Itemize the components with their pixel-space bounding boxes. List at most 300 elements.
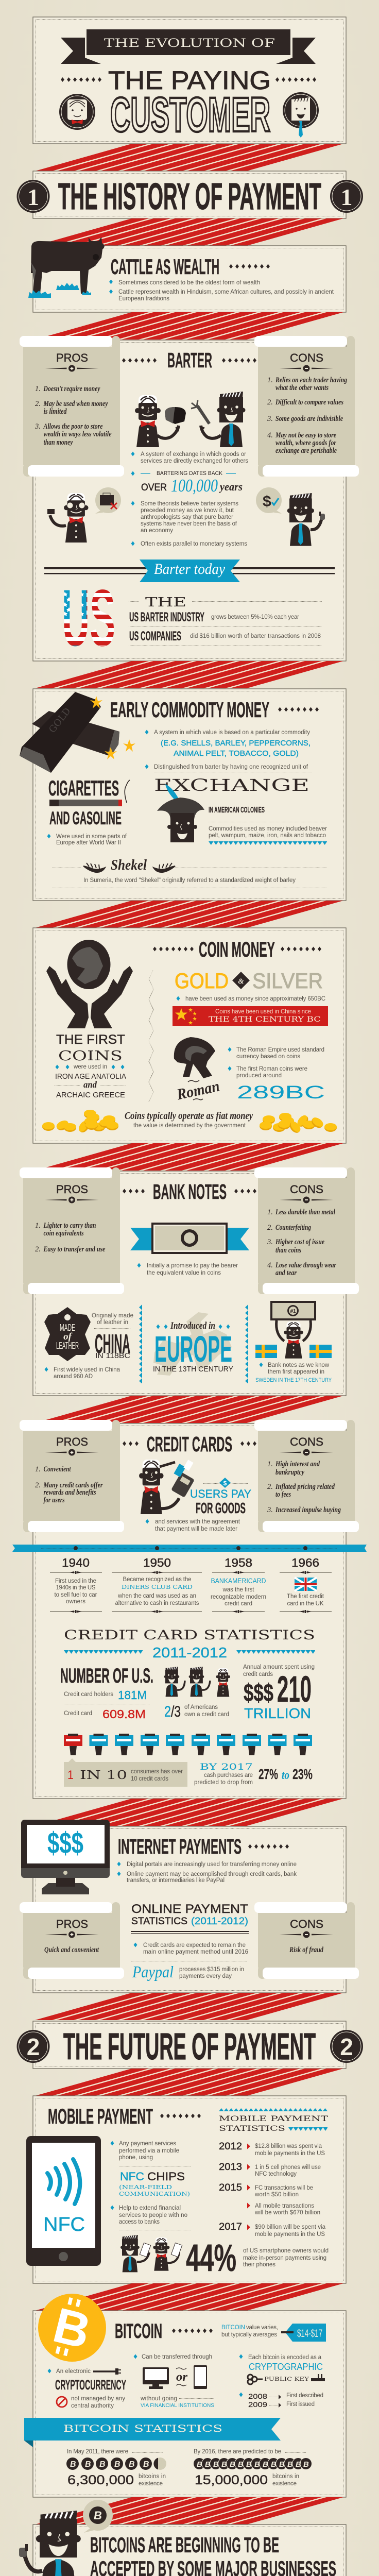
text: commodity definition: ANIMAL PELT, TOBACCO, GOLD) [174, 749, 299, 758]
text: commodity definition: A system in which value is based on a particular commodity [154, 730, 310, 736]
heading: mobile payment: MOBILE PAYMENT [48, 2104, 153, 2128]
scroll: barter pros: Allows the poor to store [43, 422, 103, 431]
scroll: bank notes cons: 1. [267, 1208, 273, 1216]
timeline: 1950: Became recognized as the [123, 1577, 192, 1583]
icon: leather badge [44, 1307, 91, 1361]
scroll: bank notes cons: CONS [290, 1183, 323, 1196]
timeline: 1966: card in the UK [287, 1601, 324, 1607]
callout: bitcoin value tag: BITCOIN [221, 2324, 245, 2331]
text: roman coins [228, 1047, 325, 1103]
stat: 44 percent: make in-person payments using [243, 2255, 326, 2261]
heading: exchange: EXCHANGE [154, 775, 309, 795]
text: the US barter stats: did $16 billion worth of barter transactions in 2008 [190, 633, 321, 639]
icons: ten hands holding cards [64, 1734, 312, 1755]
stat: 44 percent [186, 2236, 329, 2279]
list: mobile statistics by year: 2017 [219, 2222, 242, 2232]
stat: 210 trillion: credit cards [243, 1671, 273, 1677]
text: cryptographic public key: CRYPTOGRAPHIC [249, 2362, 323, 2372]
ribbon [35, 1143, 343, 1171]
text: promise to pay [137, 1263, 238, 1276]
text: barter definition: services are directly exchanged for others [141, 458, 248, 464]
stat: by 2017 cash purchases: 27% [259, 1766, 278, 1782]
list: mobile statistics by year: 2013 [219, 2162, 242, 2173]
scroll: credit cards cons: High interest and [275, 1460, 320, 1468]
text: cryptographic public key: First issued [286, 2401, 315, 2408]
ribbon [35, 901, 343, 928]
title banner: THE EVOLUTION OF [104, 37, 275, 50]
scroll: credit cards pros: PROS [56, 1435, 88, 1448]
badge 1 right [330, 180, 363, 213]
scroll: credit cards cons: bankruptcy [275, 1468, 304, 1477]
stat: bitcoins in 2011: bitcoins in [139, 2473, 166, 2480]
panel: barter: US [62, 573, 115, 663]
text: cattle facts: Sometimes considered to be the oldest form of wealth [118, 280, 260, 286]
list: mobile statistics by year: mobile payments in the US [255, 2231, 325, 2238]
text: shekel note: Shekel [111, 857, 147, 873]
stat: bitcoins in 2011: existence [139, 2481, 163, 2487]
text: online payment statistics: Credit cards are expected to remain the [143, 1942, 246, 1948]
text: transfer through devices: VIA FINANCIAL INSTITUTIONS [141, 2403, 214, 2409]
list: mobile statistics by year: mobile payments in the US [255, 2150, 325, 2157]
text: barter theory: Some theorists believe barter systems [141, 501, 238, 507]
stat: 44 percent: of US smartphone owners would [243, 2248, 329, 2254]
heading: gold and silver: GOLD [175, 969, 229, 993]
scroll: bank notes pros: Lighter to carry than [43, 1222, 96, 1230]
banner: bitcoin statistics [24, 2418, 281, 2447]
illustration: man holding note with swedish flags [255, 1301, 332, 1359]
text: cigarettes and gasoline: CIGARETTES [48, 776, 119, 800]
ribbon [35, 2497, 343, 2524]
stat: bitcoins in 2016: 15,000,000 [195, 2473, 268, 2487]
text: the US barter stats: US COMPANIES [129, 629, 181, 643]
text: cryptographic public key [239, 2354, 325, 2409]
text: barter theory: an economy [141, 528, 173, 534]
timeline: 1958: credit card [225, 1601, 252, 1607]
callout: 1 in 10 consumers: 1 [67, 1768, 74, 1782]
heading: cattle as wealth: CATTLE AS WEALTH [111, 255, 219, 279]
text: online payment statistics: STATISTICS [131, 1916, 187, 1927]
timeline: 1966 [280, 1556, 332, 1613]
callout: 1 in 10 consumers [64, 1758, 187, 1787]
text: cigarettes and gasoline: Were used in some parts of [56, 834, 127, 840]
scroll: bank notes cons: 3. [267, 1238, 273, 1246]
scroll: bank notes pros: PROS [56, 1183, 88, 1196]
heading: gold and silver [175, 969, 325, 1002]
text: cigarettes and gasoline [47, 776, 130, 846]
illustration: customers with phones [120, 2235, 182, 2272]
timeline: 1958: was the first [222, 1587, 254, 1593]
panel: bank notes [20, 1167, 359, 1396]
illustration: 2/3 of Americans: 2 [164, 1703, 171, 1720]
text: commodity definition [145, 730, 313, 772]
callout: 1 in 10 consumers: consumers has over [131, 1769, 183, 1775]
text: commodity definition: Distinguished from barter by having one recognized unit of [154, 764, 308, 770]
illustration: customer offers carrot [191, 392, 245, 447]
scroll: bank notes pros [20, 1167, 124, 1294]
portrait: bow tie customer [59, 94, 95, 130]
text: users pay for goods: USERS PAY [190, 1487, 251, 1500]
text: shekel note [52, 857, 327, 888]
scroll: bank notes cons: Less durable than metal [275, 1208, 335, 1216]
illustration: roman helmet: Roman [175, 1078, 221, 1104]
title panel [33, 17, 346, 144]
text: made in china: First widely used in China [54, 1367, 120, 1373]
text: roman coins: produced around [236, 1073, 282, 1079]
scroll: credit cards cons: to fees [275, 1490, 291, 1499]
text: roman coins: currency based on coins [236, 1054, 300, 1060]
text: the first coins: THE FIRST [56, 1032, 125, 1047]
icon: desktop monitor [21, 1820, 110, 1894]
text: sweden: them first appeared in [268, 1369, 324, 1375]
text: american colonies: Commodities used as money included beaver [209, 826, 327, 832]
panel: internet payments [20, 1820, 359, 1993]
text: barter theory: Often exists parallel to monetary systems [141, 541, 247, 547]
heading: bank notes: BANK NOTES [153, 1180, 227, 1204]
icon: leather badge: MADE [60, 1323, 75, 1333]
text: shekel note: In Sumeria, the word "Shekel" originally referred to a standardized weight of barley [83, 877, 296, 884]
text: internet payment facts: Online payment may be accomplished through credit cards, bank [127, 1871, 297, 1877]
icon: bitcoin coin: B [48, 2297, 96, 2360]
text: transfer through devices [134, 2354, 214, 2409]
callout: bitcoin value tag: value varies, [246, 2325, 278, 2331]
icon: leather badge: of [63, 1331, 73, 1342]
heading: gold and silver: SILVER [252, 969, 323, 993]
scroll: internet pros [20, 1902, 124, 1979]
scroll: credit cards pros: rewards and benefits [43, 1488, 96, 1497]
scroll: barter cons: CONS [290, 351, 323, 364]
text: the first coins: and [83, 1079, 97, 1090]
text: the first coins [55, 1032, 126, 1099]
scroll: barter pros: wealth in ways less volatile [43, 430, 112, 438]
timeline: 1950 [112, 1556, 202, 1613]
text: the US barter stats: THE [145, 595, 186, 609]
panel: bitcoins accepted [19, 2500, 346, 2576]
scroll: internet pros: Quick and convenient [44, 1946, 99, 1954]
timeline: 1940 [50, 1556, 102, 1613]
scroll: barter pros: PROS [56, 351, 88, 364]
scroll: credit cards cons: Inflated pricing related [275, 1483, 335, 1491]
scroll: barter cons [254, 336, 359, 477]
stat: 210 trillion: TRILLION [244, 1705, 311, 1721]
text: NFC chips: Help to extend financial [119, 2205, 181, 2211]
illustration: customer with thumbs up and bubble [256, 487, 325, 546]
text: made in china: of leather in [97, 1319, 128, 1326]
text: users pay for goods: FOR GOODS [196, 1500, 246, 1517]
stat: bitcoins in 2011 [66, 2449, 166, 2487]
illustration: customer with glasses and bubble [47, 487, 121, 543]
scroll: bank notes cons: than coins [275, 1246, 301, 1255]
text: NFC chips: Any payment services [119, 2141, 176, 2147]
badge 1 right: 1 [341, 184, 352, 210]
icon: hands holding coin [46, 940, 133, 1028]
list: mobile statistics by year: 2015 [219, 2182, 242, 2193]
text: NFC chips: (NEAR-FIELD [119, 2184, 172, 2191]
icons: gold coin piles [42, 1110, 337, 1135]
illustration: colonial man with feather [157, 784, 204, 842]
stat: by 2017 cash purchases: BY 2017 [200, 1762, 253, 1772]
heading: credit cards: CREDIT CARDS [147, 1432, 232, 1456]
scroll: bank notes pros: 2. [35, 1245, 41, 1253]
text: NFC chips: COMMUNICATION) [119, 2191, 190, 2197]
scroll: credit cards pros: 1. [35, 1465, 41, 1473]
divider: dotted zigzag [149, 971, 153, 1101]
stat: bitcoins in 2016 [194, 2449, 312, 2487]
scroll: internet cons [254, 1902, 359, 1979]
heading: gold and silver: & [238, 977, 244, 986]
text: online payment statistics: (2011-2012) [191, 1916, 248, 1927]
ribbon [35, 661, 343, 688]
heading: coin money [153, 937, 321, 961]
list: mobile statistics by year: All mobile transactions [255, 2203, 314, 2209]
text: sweden: SWEDEN IN THE 17TH CENTURY [255, 1377, 332, 1383]
callout: 1 in 10 consumers: 10 credit cards [131, 1776, 168, 1782]
text: transfer through devices: Can be transferred through [142, 2354, 212, 2360]
timeline: 1940: First used in the [55, 1578, 96, 1584]
scroll: barter pros: than money [43, 438, 73, 447]
scroll: bank notes cons [254, 1167, 359, 1294]
panel: cattle as wealth [28, 237, 346, 312]
text: cryptographic public key: First described [286, 2393, 323, 2399]
scroll: bank notes cons: 2. [267, 1224, 273, 1232]
title banner [61, 29, 316, 64]
text: cryptocurrency: CRYPTOCURRENCY [55, 2377, 126, 2393]
text: internet payment facts [117, 1861, 297, 1884]
scroll: bank notes cons: and tear [275, 1269, 297, 1277]
text: cryptographic public key: 2009 [248, 2400, 267, 2409]
text: fiat money: Coins typically operate as fiat money [125, 1110, 253, 1122]
callout: 1 in 10 consumers: IN 10 [80, 1769, 127, 1782]
list: mobile statistics by year [219, 2141, 326, 2238]
icon: leather badge: LEATHER [56, 1341, 79, 1351]
scroll: credit cards pros [20, 1420, 124, 1532]
scroll: barter cons: 4. [267, 431, 273, 439]
text: cryptocurrency: An electronic [56, 2368, 91, 2375]
list: mobile statistics by year: $90 billion will be spent via [255, 2224, 326, 2230]
list: mobile statistics by year: NFC technology [255, 2171, 297, 2177]
text: roman coins: The first Roman coins were [236, 1066, 307, 1072]
text: the US barter stats: grows between 5%-10% each year [211, 614, 299, 620]
text: internet payment facts: transfers, or intermediaries like PayPal [127, 1877, 225, 1884]
map: europe [153, 1312, 232, 1376]
banner: bitcoin statistics: BITCOIN STATISTICS [63, 2423, 222, 2434]
scroll: barter pros: 3. [35, 422, 41, 431]
text: users pay for goods [145, 1478, 251, 1532]
ribbon [35, 144, 343, 171]
text: sweden: Bank notes as we know [268, 1362, 330, 1368]
text: online payment statistics: main online payment method until 2016 [143, 1949, 248, 1955]
text: introduced in europe: IN THE 13TH CENTURY [153, 1365, 233, 1374]
scroll: bank notes pros: 1. [35, 1222, 41, 1230]
scroll: bank notes cons: Higher cost of issue [275, 1238, 324, 1246]
text: the US barter stats [129, 595, 322, 646]
heading: bitcoin: BITCOIN [115, 2320, 162, 2343]
text: the first coins: COINS [58, 1048, 123, 1064]
text: promise to pay: Initially a promise to pay the bearer [147, 1263, 238, 1269]
text: made in china: Originally made [92, 1313, 133, 1319]
scroll: barter cons: what the other wants [275, 384, 329, 392]
heading: barter [122, 348, 256, 372]
scroll: credit cards pros: 2. [35, 1481, 41, 1489]
text: roman coins: 289BC [237, 1082, 325, 1103]
heading: bank notes [123, 1180, 256, 1204]
callout: bitcoin value tag: but typically averages [221, 2332, 277, 2338]
scroll: credit cards cons: 3. [267, 1506, 273, 1514]
text: online payment statistics: Paypal [132, 1962, 174, 1981]
text: cryptocurrency: central authority [71, 2403, 114, 2409]
text: barter theory: anthropologists say that pure barter [141, 514, 233, 520]
scroll: barter pros: is limited [43, 408, 67, 416]
stat: 210 trillion: Annual amount spent using [243, 1664, 315, 1670]
scroll: credit cards cons: CONS [290, 1435, 323, 1448]
stat: 44 percent: their phones [243, 2262, 275, 2268]
text: barter theory: systems have never been the basis of [141, 521, 237, 527]
list: mobile statistics by year: will be worth $670 billion [254, 2210, 320, 2216]
text: transfer through devices: or [176, 2370, 188, 2384]
timeline: 1950: 1950 [143, 1556, 171, 1569]
scroll: barter pros: 2. [35, 400, 41, 408]
text: internet payment facts: Digital portals are increasingly used for transferring money online [127, 1861, 297, 1868]
scroll: internet cons: CONS [290, 1918, 323, 1930]
heading: bitcoins accepted [90, 2533, 336, 2576]
illustration: customer with card terminal [139, 1460, 195, 1514]
scroll: bank notes cons: Lose value through wear [275, 1261, 336, 1269]
timeline: 1940: 1940s in the US [56, 1585, 96, 1591]
timeline: 1966: The first credit [287, 1594, 324, 1600]
stat: by 2017 cash purchases: to [282, 1769, 289, 1782]
text: NFC chips: services to people with no [119, 2212, 187, 2218]
timeline band [12, 1545, 367, 1552]
callout: over 100,000 years: OVER [141, 482, 167, 493]
banner: barter today [44, 560, 335, 582]
text: NFC chips [110, 2141, 191, 2230]
text: fiat money [125, 1110, 253, 1129]
panel: bitcoin [24, 2294, 346, 2497]
banner: barter today: Barter today [154, 561, 226, 578]
scroll: barter pros [20, 336, 124, 477]
scroll: barter cons: Some goods are indivisible [275, 415, 343, 423]
stat: bitcoins in 2011: 6,300,000 [67, 2473, 134, 2487]
icon: cow [28, 237, 105, 298]
heading: coin money: COIN MONEY [199, 937, 275, 961]
timeline: 1958: BANKAMERICARD [211, 1577, 266, 1585]
illustration: 2/3 of Americans: of Americans [184, 1704, 218, 1710]
text: cigarettes and gasoline: Europe after World War II [56, 840, 121, 846]
timeline: 1950: when the card was used as an [117, 1593, 196, 1599]
text: online payment statistics [131, 1902, 249, 1981]
stat: number of US cards: Credit card holders [64, 1691, 113, 1698]
heading: credit card statistics: 2011-2012 [152, 1645, 227, 1660]
timeline: 1950: DINERS CLUB CARD [122, 1584, 193, 1590]
list: mobile statistics by year: worth $50 billion [254, 2192, 299, 2198]
text: american colonies: pelt, wampum, maize, iron, nails and tobacco [209, 833, 326, 839]
panel: mobile payment [26, 2096, 346, 2283]
text: cryptographic public key: Each bitcoin is encoded as a [248, 2354, 322, 2361]
text: sweden [255, 1362, 332, 1383]
illustration: 2/3 of Americans: own a credit card [184, 1711, 229, 1718]
badge 2 left: 2 [27, 2033, 40, 2060]
ribbon [35, 218, 343, 246]
callout: over 100,000 years [131, 470, 243, 496]
stat: 44 percent: 44% [186, 2236, 236, 2279]
heading: credit card statistics [64, 1628, 315, 1660]
illustration: customer with bitcoin bubble: B [94, 2509, 102, 2522]
scroll: internet pros: PROS [56, 1918, 88, 1930]
text: online payment statistics: ONLINE PAYMENT [131, 1902, 248, 1916]
illustration: customer with bitcoin bubble [19, 2500, 113, 2576]
scroll: credit cards pros: for users [43, 1496, 65, 1504]
portrait: necktie customer [283, 92, 319, 138]
callout: bitcoin value tag: $14-$17 [297, 2328, 322, 2340]
scroll: credit cards cons [254, 1420, 359, 1532]
text: cryptocurrency: not managed by any [71, 2396, 125, 2402]
stat: bitcoins in 2016: bitcoins in [272, 2473, 299, 2480]
text: introduced in europe: Introduced in [170, 1320, 215, 1331]
text: barter definition: A system of exchange in which goods or [141, 451, 246, 457]
text: fiat money: the value is determined by the government [133, 1123, 246, 1129]
scroll: barter cons: Difficult to compare values [275, 398, 343, 406]
badge 1 left [16, 180, 49, 213]
text: cryptographic public key: 2008 [248, 2392, 267, 2400]
text: made in china: around 960 AD [54, 1374, 93, 1380]
scroll: barter pros: Doesn't require money [43, 385, 100, 393]
text: the first coins: IRON AGE ANATOLIA [55, 1072, 126, 1081]
stat: bitcoins in 2016: BBBBBBBBBBBBBB [197, 2460, 309, 2469]
stat: number of US cards: 181M [118, 1688, 147, 1702]
text: NFC chips: CHIPS [147, 2170, 185, 2183]
text: cryptographic public key: PUBLIC KEY [264, 2377, 309, 2382]
text: made in china: IN 118BC [95, 1351, 130, 1360]
stat: bitcoins in 2011: In May 2011, there were [67, 2449, 128, 2455]
stat: 210 trillion: $$$ [244, 1680, 273, 1707]
illustration: 2/3 of Americans [164, 1667, 230, 1720]
ribbon [35, 1993, 343, 2020]
text: the US barter stats: US BARTER INDUSTRY [129, 610, 204, 624]
stat: by 2017 cash purchases: cash purchases are [204, 1772, 253, 1778]
panel: bank notes: CHINA [95, 1329, 130, 1359]
badge 1 left: 1 [27, 184, 39, 210]
stat: 210 trillion: 210 [277, 1669, 312, 1710]
scroll: barter cons: wealth, where goods for [275, 439, 336, 447]
text: NFC chips: performed via a mobile [119, 2148, 179, 2154]
ribbon [35, 312, 343, 340]
heading: barter: BARTER [167, 348, 212, 372]
text: cigarettes and gasoline: AND GASOLINE [49, 808, 122, 828]
scroll: internet cons: Risk of fraud [289, 1946, 324, 1954]
scroll: bank notes cons: 4. [267, 1261, 273, 1269]
illustration: customer with thumbs up and bubble: $ [263, 493, 271, 510]
scroll: barter pros: 1. [35, 385, 41, 393]
scroll: barter cons: 2. [267, 398, 273, 406]
text: cryptocurrency [47, 2368, 126, 2409]
callout: over 100,000 years: 100,000 [171, 476, 218, 496]
text: made in china [44, 1313, 133, 1380]
stat: by 2017 cash purchases: 23% [292, 1766, 313, 1782]
timeline: 1940: owners [66, 1599, 85, 1605]
scroll: credit cards cons: Increased impulse buying [275, 1506, 341, 1514]
text: cattle facts: European traditions [118, 296, 169, 302]
icon: bank note on ribbon [130, 1223, 249, 1254]
icon: gold bars: GOLD [47, 706, 73, 735]
text: NFC chips: NFC [120, 2170, 144, 2183]
text: users pay for goods: $ [223, 1480, 227, 1487]
stat: 210 trillion [243, 1664, 315, 1721]
heading: the paying: THE PAYING [108, 66, 271, 95]
text: transfer through devices: without going [140, 2396, 177, 2402]
heading: mobile payment statistics: STATISTICS [219, 2125, 285, 2133]
text: users pay for goods: and services with the agreement [155, 1519, 240, 1525]
list: mobile statistics by year: 2012 [219, 2141, 242, 2152]
scroll: credit cards cons: 1. [267, 1460, 273, 1468]
